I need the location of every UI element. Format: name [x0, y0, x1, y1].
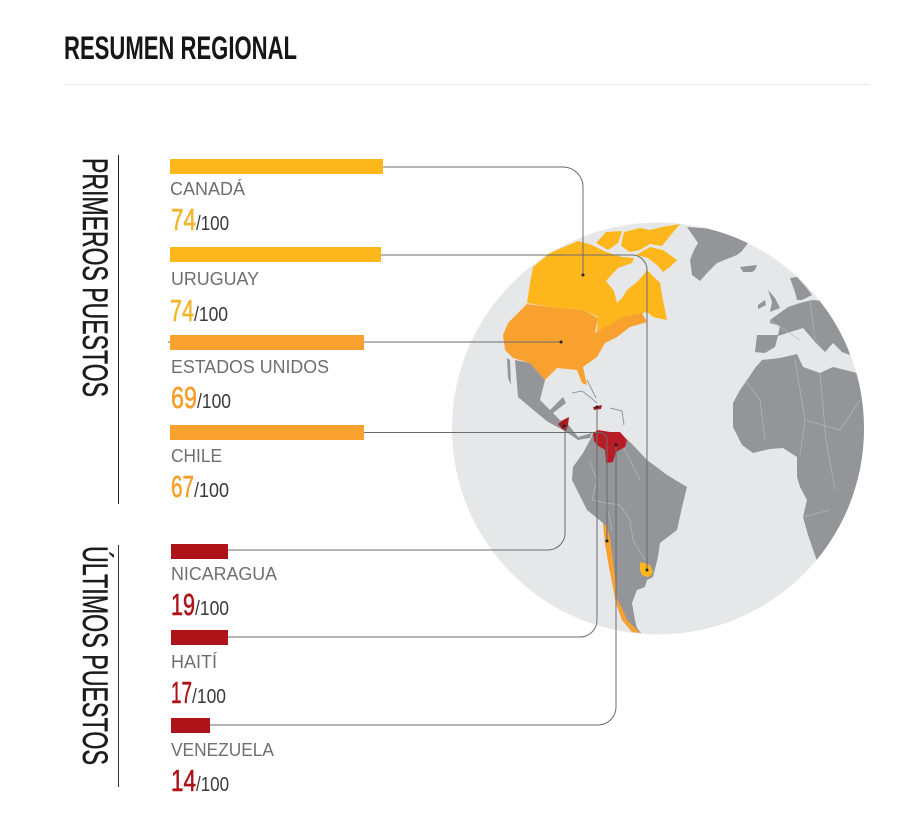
row: Venezuela: 14 [171, 763, 196, 798]
row: Chile: /100 [194, 480, 229, 502]
row: Venezuela: /100 [196, 774, 229, 796]
connector: Estados Unidos [168, 340, 562, 344]
row: Nicaragua: /100 [195, 598, 229, 620]
map: Greenland and Iceland [687, 227, 757, 281]
row: Haití: 17 [171, 675, 192, 710]
row: Chile [170, 425, 364, 504]
row: Canadá: 74 [171, 202, 196, 237]
connector: Uruguay [381, 255, 648, 572]
connector: Venezuela [210, 444, 618, 725]
row: Nicaragua: 19 [171, 587, 195, 622]
row: Chile: CHILE [171, 446, 222, 466]
map: South America [572, 433, 687, 633]
row: Uruguay: /100 [194, 304, 228, 326]
map: Haiti [593, 405, 602, 410]
row: Chile: 67 [171, 469, 194, 504]
row: Canadá: CANADÁ [170, 179, 245, 199]
map: Mexico and Central America [507, 358, 592, 440]
row: Estados Unidos: /100 [197, 391, 231, 413]
connector: Haití [228, 406, 598, 637]
map: United States [503, 304, 647, 385]
row: Estados Unidos: 69 [171, 380, 197, 415]
row: Canadá [170, 159, 383, 237]
row: Uruguay [170, 247, 381, 328]
map: country borders [590, 300, 860, 560]
row: Nicaragua: NICARAGUA [171, 564, 277, 584]
map: British Isles and Scandinavia [758, 277, 812, 312]
row: Estados Unidos [170, 335, 364, 415]
map: Caribbean islands [572, 380, 624, 425]
map: Uruguay [640, 562, 653, 577]
map: Canadian Arctic islands [596, 224, 680, 272]
globe map [452, 222, 885, 634]
row: Venezuela: VENEZUELA [171, 740, 274, 760]
row: Uruguay: 74 [170, 293, 194, 328]
row: Venezuela [171, 718, 274, 798]
row: Uruguay: URUGUAY [171, 269, 259, 289]
connector: Chile [364, 432, 608, 542]
group heading: primeros puestos: PRIMEROS PUESTOS [75, 158, 114, 397]
map: Nicaragua [558, 417, 569, 431]
row: Haití: /100 [192, 686, 226, 708]
row: Nicaragua [171, 544, 277, 622]
row: Canadá: /100 [196, 213, 229, 235]
connector: Nicaragua [228, 424, 566, 550]
map: Chile [603, 523, 641, 633]
title: RESUMEN REGIONAL [64, 30, 297, 66]
row: Haití: HAITÍ [171, 652, 217, 672]
row: Haití [171, 630, 228, 710]
map: Venezuela [593, 430, 627, 463]
map: Africa [733, 354, 864, 560]
connector: Canadá [383, 167, 584, 276]
row: Estados Unidos: ESTADOS UNIDOS [171, 357, 329, 377]
map: Canada [527, 241, 667, 333]
map: Europe [755, 300, 850, 355]
